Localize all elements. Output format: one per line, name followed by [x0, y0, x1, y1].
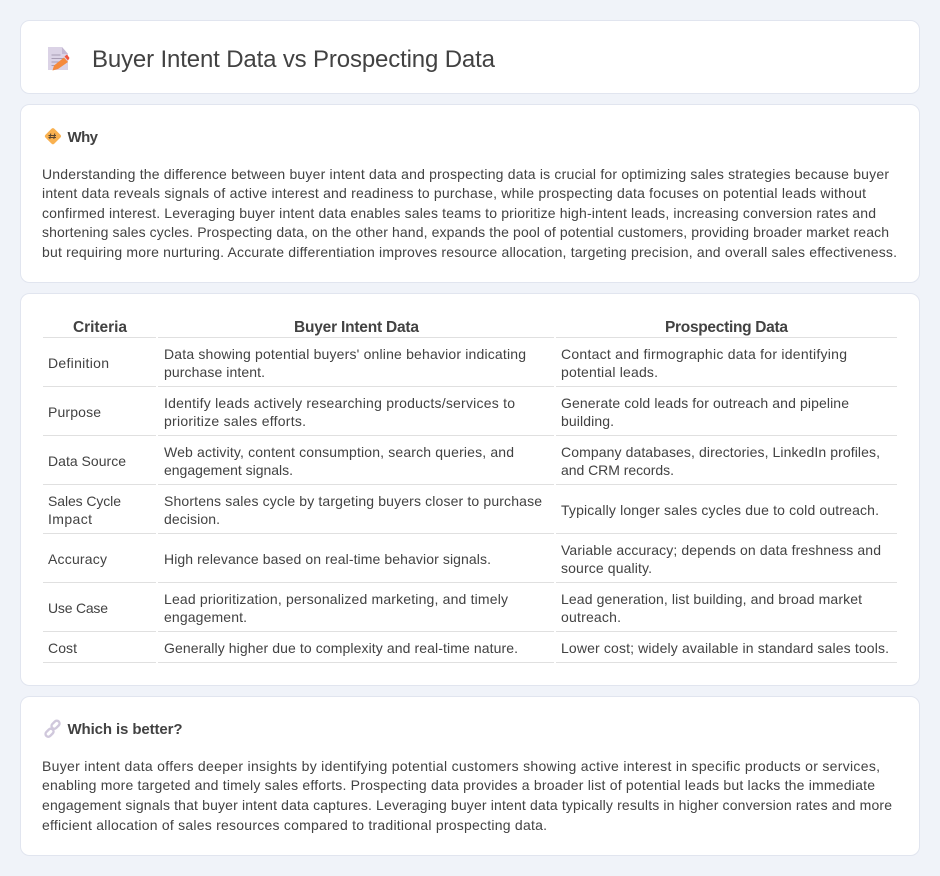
row: accuracy: source quality. — [561, 560, 652, 576]
row: use case: Lead prioritization, personalized marketing, and timely — [164, 591, 508, 607]
row: use case: Use Case — [48, 600, 108, 616]
text block: which is better paragraph: Buyer intent data offers deeper insights by identifying potential customers showing active interest in specific products or services, — [42, 758, 880, 774]
row: accuracy: Variable accuracy; depends on data freshness and — [561, 542, 881, 558]
row: sales cycle impact: Shortens sales cycle by targeting buyers closer to purchase — [164, 493, 542, 509]
row: accuracy: Accuracy — [48, 551, 107, 567]
row: purpose: Purpose — [48, 404, 101, 420]
panel: which is better — [20, 696, 920, 856]
row: cost: Generally higher due to complexity and real-time nature. — [164, 640, 518, 656]
title: Buyer Intent Data vs Prospecting Data — [92, 46, 496, 73]
panel: comparison table — [20, 294, 920, 686]
row: use case: Lead generation, list building, and broad market — [561, 591, 862, 607]
row: purpose: Generate cold leads for outreach and pipeline — [561, 395, 849, 411]
text block: which is better paragraph: engagement signals that buyer intent data captures. Leveraging buyer intent data typically results in higher conversion rates and more — [42, 797, 892, 813]
row: data source: and CRM records. — [561, 462, 674, 478]
text block: why paragraph: confirmed interest. Leveraging buyer intent data enables sales teams to prioritize high-intent leads, increasing conversion rates and — [42, 205, 876, 221]
row: purpose: Identify leads actively researching products/services to — [164, 395, 515, 411]
table header row: Buyer Intent Data — [294, 319, 419, 336]
row: data source: Web activity, content consumption, search queries, and — [164, 444, 514, 460]
row: cost: Lower cost; widely available in standard sales tools. — [561, 640, 889, 656]
panel: header — [20, 20, 920, 94]
row: cost — [48, 640, 889, 656]
row: accuracy — [48, 542, 881, 576]
row: purpose — [48, 395, 849, 429]
text block: why paragraph: Understanding the difference between buyer intent data and prospecting data is crucial for optimizing sales strategies because buyer — [42, 166, 889, 182]
row: sales cycle impact: Sales Cycle — [48, 493, 121, 509]
table header row: Criteria — [73, 319, 127, 336]
panel: why — [20, 104, 920, 282]
row: definition: Contact and firmographic data for identifying — [561, 346, 847, 362]
text block: why paragraph: but requiring more nurturing. Accurate differentiation improves resource allocation, targeting precision, and overall sales effectiveness. — [42, 244, 897, 260]
text block: which is better paragraph: enabling more targeted and timely sales efforts. Prospecting data provides a broader list of potential leads but lacks the immediate — [42, 777, 875, 793]
row: definition: purchase intent. — [164, 364, 265, 380]
icon: orange diamond — [44, 127, 62, 145]
row: sales cycle impact — [48, 493, 879, 527]
row: use case: engagement. — [164, 609, 247, 625]
row: sales cycle impact: decision. — [164, 511, 220, 527]
row: definition: Data showing potential buyers' online behavior indicating — [164, 346, 526, 362]
heading: why: Why — [68, 129, 99, 146]
text block: why paragraph: shortening sales cycles. Prospecting data, on the other hand, expands the pool of potential customers, providing broader market reach — [42, 224, 889, 240]
icon: document with pencil — [48, 47, 70, 70]
row: cost: Cost — [48, 640, 77, 656]
row: purpose: building. — [561, 413, 614, 429]
row: accuracy: High relevance based on real-time behavior signals. — [164, 551, 491, 567]
text block: why paragraph — [42, 166, 897, 260]
icon: link — [44, 720, 61, 738]
row: data source: engagement signals. — [164, 462, 293, 478]
row: use case — [48, 591, 862, 625]
table header row — [73, 319, 788, 336]
row: sales cycle impact: Typically longer sales cycles due to cold outreach. — [561, 502, 879, 518]
text block: which is better paragraph — [42, 758, 892, 833]
row: definition — [48, 346, 847, 380]
table header row: Prospecting Data — [665, 319, 788, 336]
row: definition: potential leads. — [561, 364, 658, 380]
row: data source: Data Source — [48, 453, 126, 469]
row: sales cycle impact: Impact — [48, 511, 92, 527]
row: data source: Company databases, directories, LinkedIn profiles, — [561, 444, 880, 460]
row: purpose: prioritize sales efforts. — [164, 413, 306, 429]
text block: which is better paragraph: efficient allocation of sales resources compared to traditional prospecting data. — [42, 817, 547, 833]
row: definition: Definition — [48, 355, 109, 371]
row: data source — [48, 444, 880, 478]
row: use case: outreach. — [561, 609, 621, 625]
heading: which is better: Which is better? — [68, 721, 182, 738]
text block: why paragraph: intent data reveals signals of active interest and readiness to purchase, while prospecting data focuses on potential leads without — [42, 185, 866, 201]
